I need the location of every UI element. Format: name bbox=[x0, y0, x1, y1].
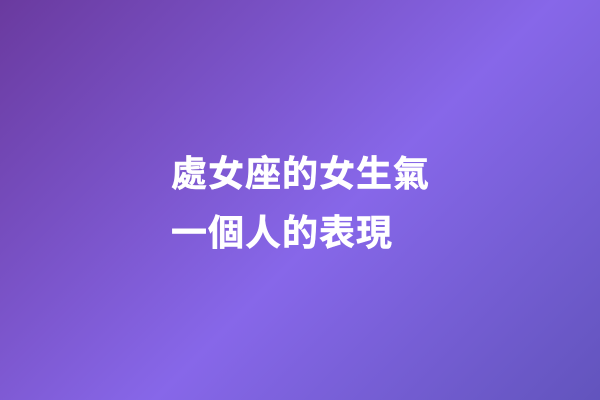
title line 1: 處女座的女生氣 bbox=[171, 153, 430, 194]
title bbox=[171, 153, 430, 253]
title line 2: 一個人的表現 bbox=[171, 212, 393, 253]
